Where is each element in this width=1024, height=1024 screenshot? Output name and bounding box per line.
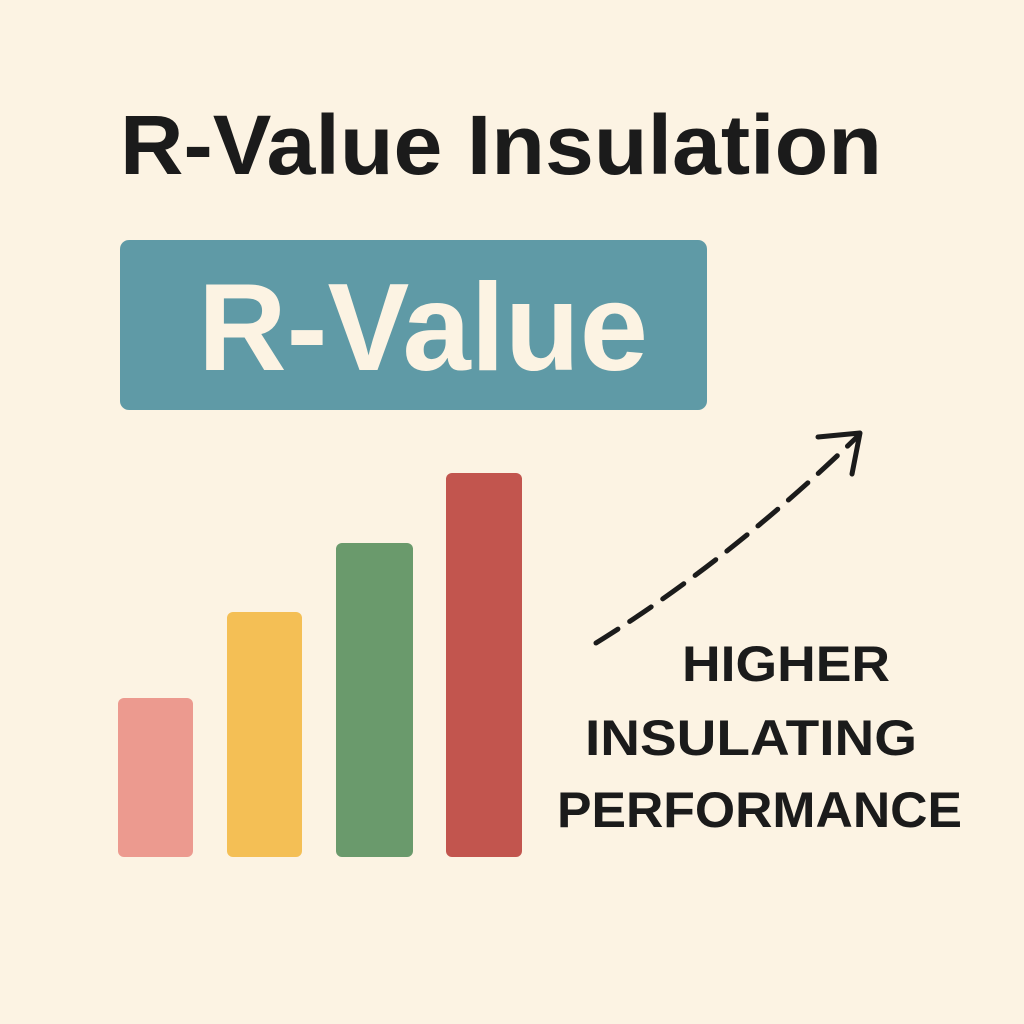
- text block: higher insulating performance: [557, 636, 962, 838]
- badge: R-Value: [120, 240, 707, 410]
- text block: higher insulating performance: PERFORMANCE: [557, 782, 962, 838]
- title: R-Value Insulation: [120, 98, 882, 192]
- text block: higher insulating performance: HIGHER: [682, 636, 890, 692]
- badge: R-Value: R-Value: [198, 259, 648, 397]
- text block: higher insulating performance: INSULATING: [585, 710, 917, 766]
- bar chart: [118, 473, 522, 857]
- arrow: dashed upward trend: [596, 433, 860, 643]
